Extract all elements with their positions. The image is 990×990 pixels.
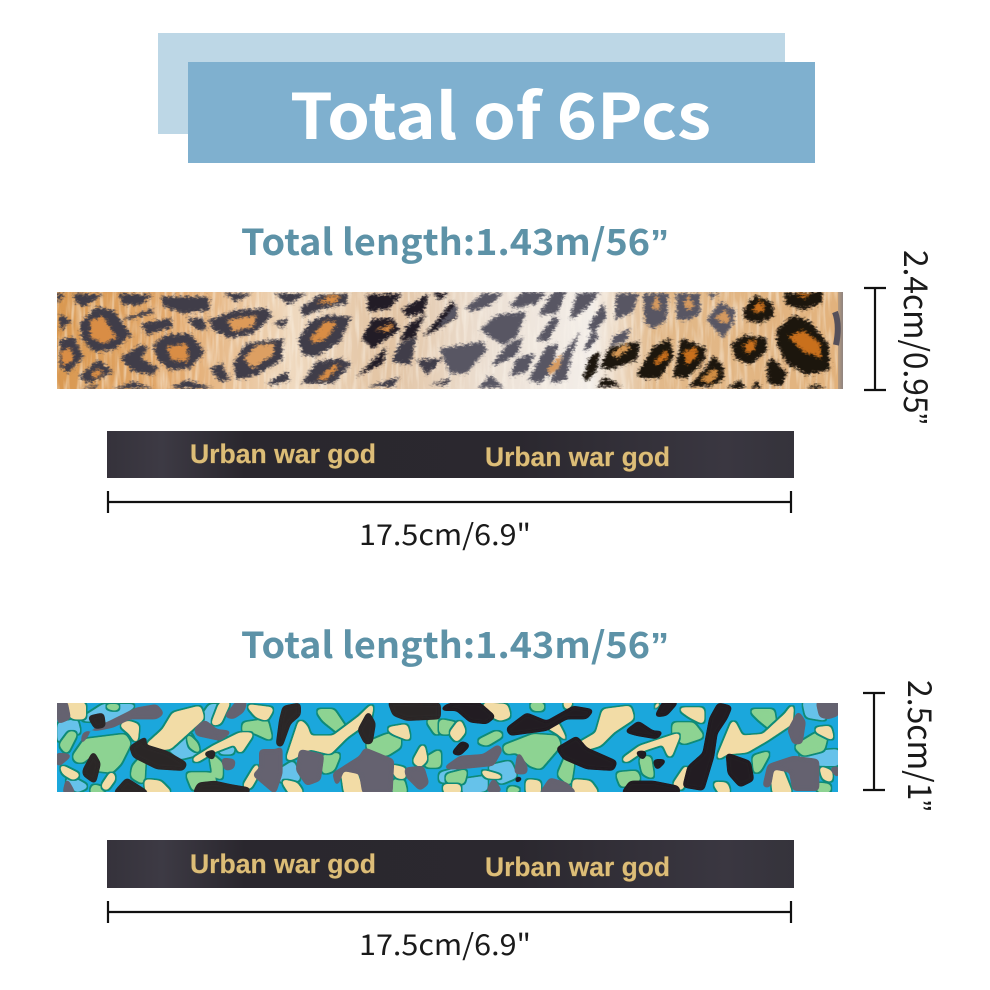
leopard print band bbox=[57, 292, 843, 389]
header banner bbox=[158, 33, 815, 163]
gold label left: Urban war god bbox=[190, 439, 376, 469]
heading: camouflage length: Total length:1.43m/56 ” bbox=[241, 617, 669, 669]
width dimension: camouflage strip bbox=[108, 901, 791, 964]
height dimension: leopard band bbox=[864, 250, 942, 424]
title: Total of 6Pcs bbox=[290, 67, 711, 158]
height label: 2.4cm/0.95” bbox=[894, 250, 942, 424]
width dimension: leopard strip bbox=[108, 491, 791, 554]
width label: 17.5cm/6.9" bbox=[359, 922, 531, 964]
camouflage print band bbox=[57, 702, 838, 793]
heading: leopard length: Total length:1.43m/56 ” bbox=[241, 214, 669, 266]
black strip with gold text: camouflage set bbox=[107, 840, 794, 888]
black strip with gold text: leopard set bbox=[107, 431, 794, 478]
gold label right: Urban war god bbox=[485, 442, 670, 472]
width label: 17.5cm/6.9" bbox=[359, 512, 531, 554]
gold label right: Urban war god bbox=[485, 852, 670, 882]
height dimension: camouflage band bbox=[863, 680, 946, 811]
height label: 2.5cm/1” bbox=[898, 680, 946, 811]
gold label left: Urban war god bbox=[190, 849, 376, 879]
